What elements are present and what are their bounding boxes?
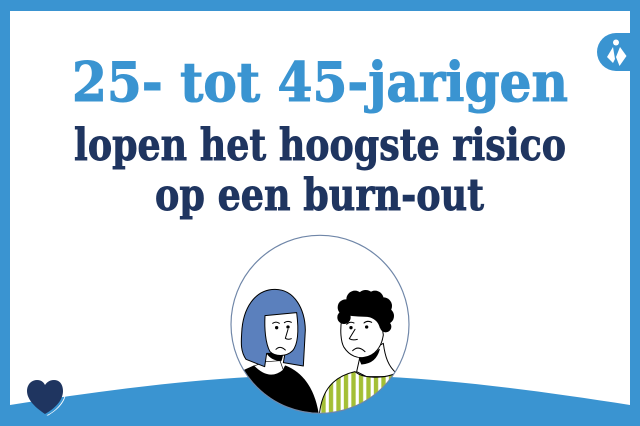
- icon: heart: [27, 380, 66, 415]
- man: [319, 290, 395, 413]
- subtitle: op een burn-out: [155, 170, 485, 221]
- illustration: two worried young adults: [231, 235, 409, 417]
- title: 25- tot 45-jarigen: [72, 50, 568, 114]
- icon: info badge: [597, 33, 630, 71]
- woman: [241, 289, 319, 417]
- subtitle: [74, 120, 566, 221]
